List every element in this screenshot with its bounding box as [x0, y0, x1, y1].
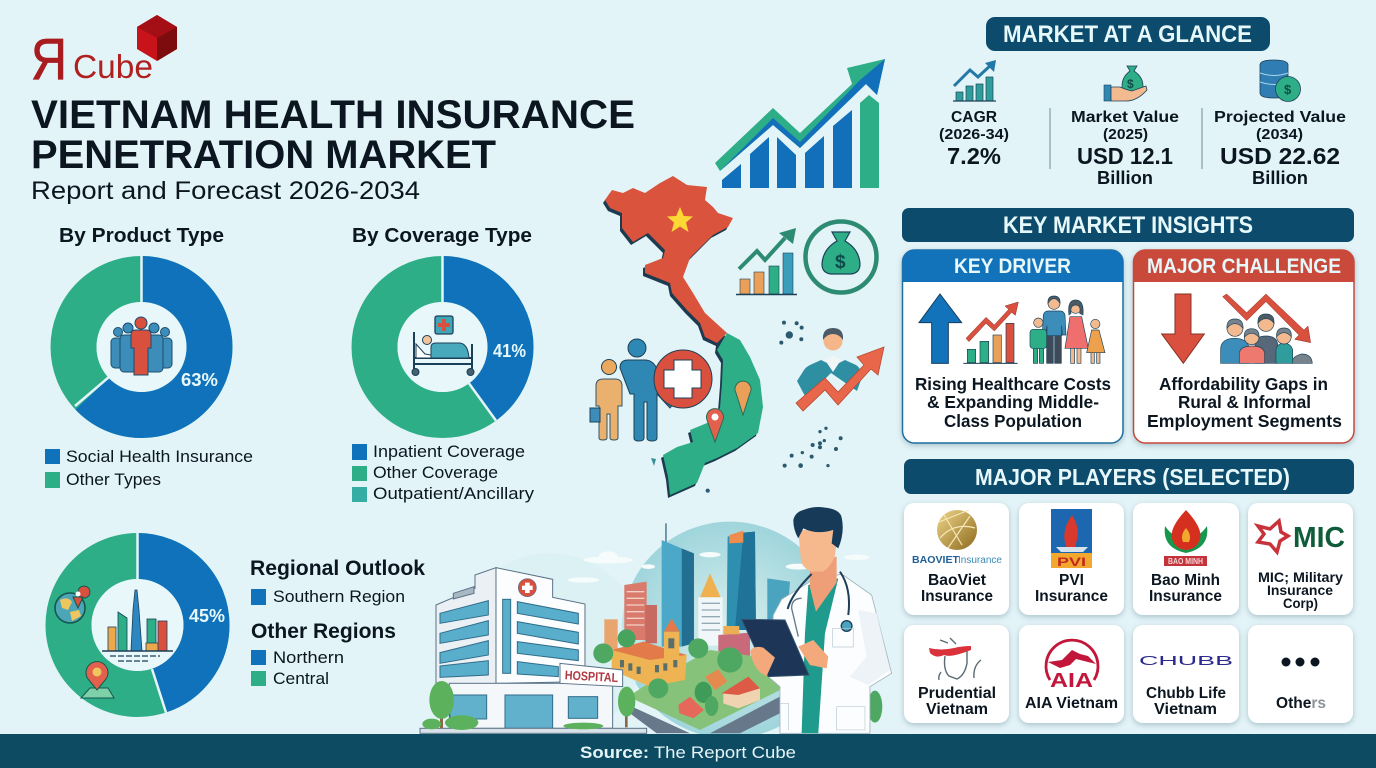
card: Bao Minh: Insurance [1149, 588, 1222, 605]
coat pockets [781, 628, 865, 730]
card: key driver [902, 250, 1123, 443]
text: challenge description [1147, 374, 1342, 431]
text: challenge description: Affordability Gaps in [1159, 374, 1328, 394]
legend: product type: Other Types [66, 470, 161, 489]
doctor scrubs [802, 578, 838, 733]
logo: PVI: PVI [1057, 555, 1086, 569]
text: challenge description: Employment Segments [1147, 411, 1342, 431]
heading: by coverage type: By Coverage Type [352, 225, 532, 247]
tablet [742, 619, 809, 677]
logo: AIA: AIA [1050, 670, 1093, 692]
card: AIA: AIA Vietnam [1025, 695, 1118, 712]
logo: RCube [31, 15, 177, 92]
stat: CAGR: 7.2% [947, 143, 1001, 169]
legend: regional outlook: Regional Outlook [250, 557, 425, 580]
stat: CAGR: (2026-34) [939, 126, 1009, 143]
text: driver description: Class Population [944, 411, 1082, 431]
clouds [567, 551, 869, 583]
legend: coverage type: Inpatient Coverage [373, 442, 525, 461]
footer: source [0, 734, 1376, 768]
donut chart: regional [68, 533, 225, 712]
hospital building [420, 568, 647, 733]
icon: three dots [1282, 658, 1320, 666]
stethoscope [788, 572, 849, 615]
icon: red pin [706, 409, 723, 442]
trees at hospital [422, 681, 635, 730]
legend: coverage type: Other Coverage [373, 463, 498, 482]
illustration: hospital and city [420, 507, 892, 740]
doctor [742, 507, 892, 733]
card: major challenge: MAJOR CHALLENGE [1147, 255, 1341, 278]
icon: money in hand: $ [1127, 77, 1134, 91]
icon: small bar chart [736, 228, 797, 294]
card: Chubb: Chubb Life [1146, 685, 1226, 702]
donut chart: product type: 63% [181, 370, 218, 390]
card: Others: Others [1276, 695, 1326, 712]
icon: CAGR chart [953, 60, 996, 101]
logo: Bao Minh: BAO MINH [1168, 557, 1203, 566]
city buildings [604, 523, 790, 657]
card: Others [1248, 625, 1353, 723]
card: MIC [1248, 503, 1353, 615]
icon: money bag in circle: $ [835, 252, 846, 273]
footer: source: Source: The Report Cube [580, 743, 796, 762]
icon: challenge illustration [1162, 294, 1312, 363]
icon: database with coin [1260, 60, 1300, 102]
card: BaoViet: BaoViet [928, 572, 987, 589]
card: Prudential [904, 625, 1009, 723]
card: Bao Minh: Bao Minh [1151, 572, 1220, 589]
logo: BaoViet [912, 510, 1002, 566]
icon: group of people [111, 317, 172, 375]
icon: driver illustration [919, 294, 1105, 363]
card: BaoViet: Insurance [921, 588, 993, 605]
heading bar [904, 459, 1354, 494]
icon: orange pin [735, 381, 751, 415]
decorative icon dots [706, 321, 843, 493]
heading pill: MARKET AT A GLANCE [1003, 21, 1252, 48]
logo: BaoViet: Insurance [958, 555, 1002, 566]
icon: city skyline [102, 590, 173, 661]
map: northern region [605, 176, 733, 343]
map of Vietnam [603, 176, 763, 498]
text: challenge description: Rural & Informal [1178, 392, 1311, 412]
logo: BaoViet: BAOVIET [912, 555, 959, 566]
donut chart: coverage type [374, 256, 526, 421]
legend: product type [45, 447, 253, 489]
doctor face [798, 530, 838, 572]
icon: money bag in circle [806, 222, 876, 292]
card: Bao Minh [1133, 503, 1239, 615]
icon: database with coin: $ [1284, 82, 1292, 97]
stat: projected value: Billion [1252, 168, 1308, 188]
stat: projected value [1214, 109, 1346, 188]
heading bar: KEY MARKET INSIGHTS [1003, 212, 1253, 239]
card: MIC: Insurance [1267, 583, 1334, 598]
legend: product type: Social Health Insurance [66, 447, 253, 466]
faint circle behind hospital [457, 553, 643, 740]
panel: major players [904, 459, 1354, 723]
logo: Prudential [929, 638, 981, 680]
doctor hair [793, 507, 843, 548]
logo: MIC: MIC [1293, 522, 1345, 554]
heading bar: MAJOR PLAYERS (SELECTED) [975, 464, 1290, 490]
icon: people with medical cross [590, 339, 712, 441]
legend: regional outlook: Southern Region [273, 587, 405, 606]
stat: market value: Market Value [1071, 109, 1179, 126]
donut chart: regional: 45% [189, 606, 225, 626]
stat: projected value: USD 22.62 [1220, 143, 1340, 169]
subtitle: Report and Forecast 2026-2034 [31, 177, 420, 205]
stat: market value: USD 12.1 [1077, 143, 1173, 169]
doctor hands [750, 647, 775, 676]
doctor neck [810, 557, 837, 612]
icon: hospital bed [412, 316, 474, 376]
card: PVI: Insurance [1035, 588, 1108, 605]
legend: regional outlook: Central [273, 669, 329, 688]
card: Prudential: Prudential [918, 685, 996, 702]
card: MIC: MIC; Military [1258, 570, 1344, 585]
legend: coverage type: Outpatient/Ancillary [373, 484, 535, 503]
card: PVI [1019, 503, 1124, 615]
card: Prudential: Vietnam [926, 701, 988, 718]
card: Chubb: Vietnam [1154, 701, 1217, 718]
stat: projected value: (2034) [1256, 126, 1303, 143]
icon: doctor with rising arrow [796, 328, 884, 411]
map: southern region [663, 333, 763, 495]
doctor coat [768, 574, 892, 733]
icon: big growth chart [715, 59, 885, 188]
logo: RCube: Cube [73, 48, 153, 85]
icon: money in hand [1104, 66, 1147, 101]
hospital sign: HOSPITAL [564, 668, 619, 685]
title: VIETNAM HEALTH INSURANCE [31, 93, 635, 137]
panel: market at a glance [939, 17, 1346, 188]
donut chart: coverage type: 41% [493, 341, 526, 361]
card: Chubb [1133, 625, 1239, 723]
card: MIC: Corp) [1283, 596, 1318, 611]
text: driver description: & Expanding Middle- [927, 392, 1099, 412]
stat: CAGR: CAGR [951, 109, 997, 126]
icon: star [667, 207, 693, 232]
panel: by coverage type [352, 225, 535, 503]
icon: map pin [81, 662, 114, 698]
card: key driver: KEY DRIVER [954, 255, 1071, 278]
text: driver description [915, 374, 1111, 431]
sky circle [622, 522, 838, 738]
card: AIA [1019, 625, 1124, 723]
card: BaoViet [904, 503, 1009, 615]
icon: globe with pin [55, 586, 90, 623]
stat: CAGR [939, 109, 1009, 169]
card: major challenge [1134, 250, 1354, 443]
small islands [651, 458, 710, 493]
logo: RCube: R [31, 27, 67, 92]
panel: by product type [45, 225, 253, 489]
title [31, 93, 635, 177]
legend: regional outlook: Other Regions [251, 620, 396, 643]
legend: regional outlook [250, 557, 425, 688]
panel: key market insights [902, 208, 1354, 443]
heading bar [902, 208, 1354, 242]
donut chart: product type [74, 256, 218, 415]
legend: coverage type [352, 442, 535, 503]
stat: market value: Billion [1097, 168, 1153, 188]
legend: regional outlook: Northern [273, 648, 344, 667]
stat: market value: (2025) [1103, 126, 1148, 143]
stat: projected value: Projected Value [1214, 109, 1346, 126]
panel: regional outlook [55, 533, 425, 712]
logo: CHUBB: CHUBB [1139, 653, 1233, 668]
title: PENETRATION MARKET [31, 133, 496, 177]
heading: by product type: By Product Type [59, 225, 224, 247]
hospital sign [560, 663, 623, 687]
city ground and road [593, 618, 780, 733]
text: driver description: Rising Healthcare Costs [915, 374, 1111, 394]
card: PVI: PVI [1059, 572, 1084, 589]
stat: market value [1071, 109, 1179, 188]
